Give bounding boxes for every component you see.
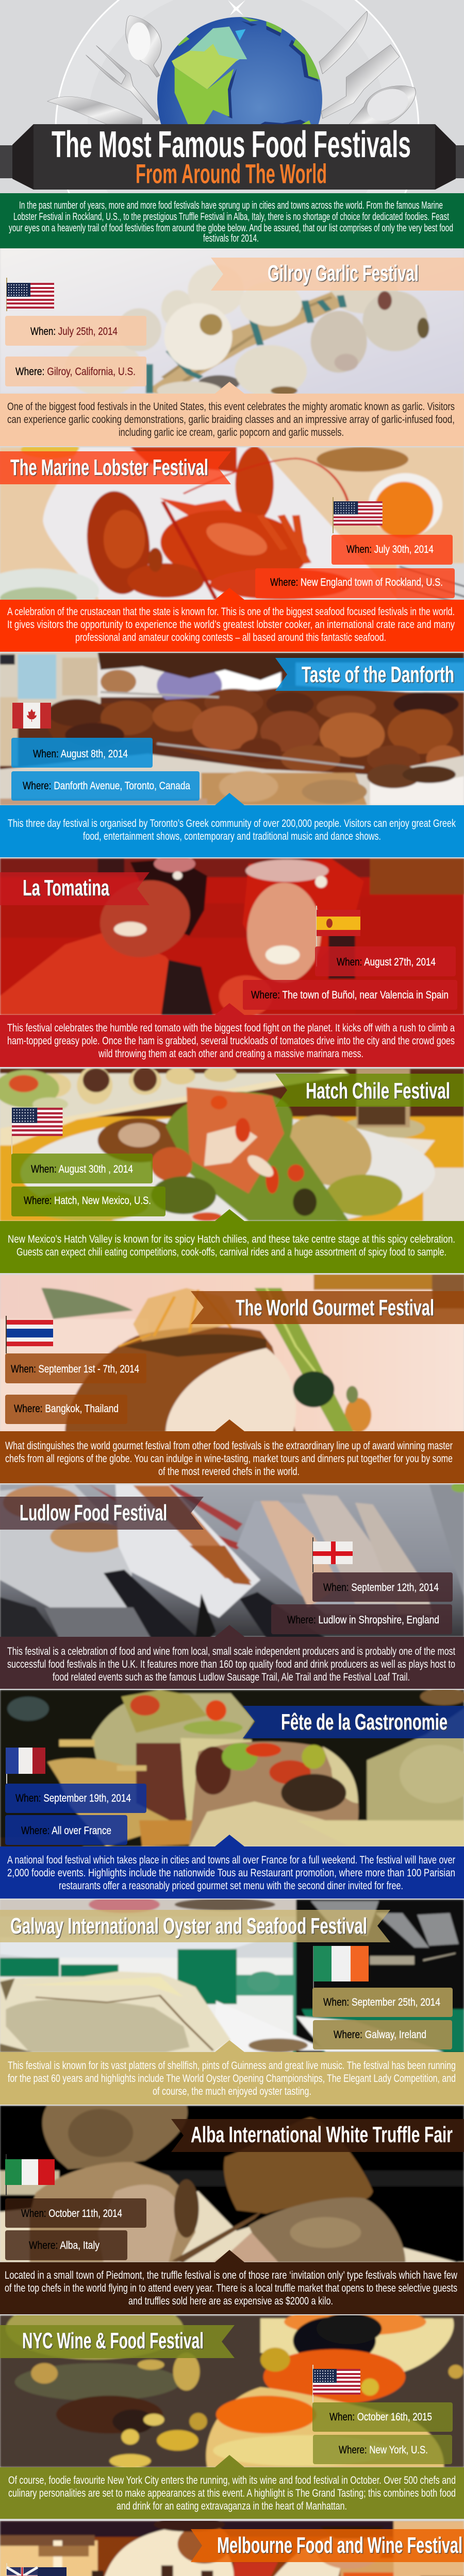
icon: US flag bbox=[12, 1108, 62, 1154]
when box bbox=[5, 1353, 146, 1383]
description panel: food, entertainment shows, contemporary and traditional music and dance shows. bbox=[83, 831, 381, 842]
when box bbox=[312, 1572, 453, 1602]
section: Gilroy Garlic Festival bbox=[0, 248, 464, 446]
title banner bbox=[243, 1706, 464, 1738]
when box bbox=[315, 946, 456, 976]
title banner: The Marine Lobster Festival bbox=[10, 455, 208, 480]
title banner: Ludlow Food Festival bbox=[20, 1500, 167, 1526]
description panel bbox=[0, 2040, 464, 2105]
header: plate, globe and cutlery illustration bbox=[47, 0, 420, 193]
title banner bbox=[0, 872, 150, 905]
when box: When: July 25th, 2014 bbox=[30, 326, 118, 337]
description panel bbox=[0, 1209, 464, 1273]
description panel: including garlic ice cream, garlic popcorn and garlic mussels. bbox=[119, 427, 344, 438]
title banner bbox=[211, 258, 464, 291]
icon: Ireland flag bbox=[313, 1946, 369, 1993]
title banner bbox=[0, 2325, 235, 2358]
title banner bbox=[191, 1291, 464, 1324]
when box: When: September 19th, 2014 bbox=[15, 1792, 131, 1804]
when box: When: August 30th , 2014 bbox=[31, 1163, 133, 1175]
subtitle: From Around The World bbox=[136, 159, 327, 190]
where box bbox=[11, 771, 200, 801]
photo: roasted birds on spits bbox=[0, 653, 464, 807]
photo: plated fish with asparagus bbox=[0, 1274, 464, 1432]
icon: Canada flag bbox=[12, 703, 51, 728]
description panel bbox=[0, 1835, 464, 1899]
section: La Tomatina bbox=[0, 855, 464, 1067]
intro text panel: festivals for 2014. bbox=[203, 233, 259, 244]
when box bbox=[11, 1154, 153, 1183]
icon: Italy flag bbox=[5, 2154, 55, 2195]
when box bbox=[5, 2198, 146, 2228]
photo: artichoke pintxos bbox=[0, 1688, 464, 1848]
when box bbox=[5, 1784, 146, 1813]
photo: lobster bbox=[0, 447, 464, 600]
photo: chefs in a kitchen bbox=[0, 2517, 464, 2576]
photo: oyster and stout bbox=[0, 1896, 464, 2061]
title banner bbox=[275, 1074, 464, 1107]
when box bbox=[332, 535, 453, 565]
title banner bbox=[275, 658, 464, 691]
title banner: NYC Wine & Food Festival bbox=[22, 2328, 204, 2353]
where box: Where: All over France bbox=[21, 1825, 111, 1837]
photo: stuffed chile plate bbox=[0, 1066, 464, 1230]
intro text panel bbox=[0, 193, 464, 248]
description panel: of the most revered chefs in the world. bbox=[158, 1466, 300, 1478]
description panel: and truffles sold here are as expensive as $2000 a kilo. bbox=[128, 2295, 333, 2307]
where box bbox=[5, 1815, 127, 1845]
when box bbox=[5, 316, 146, 346]
title banner bbox=[0, 1910, 390, 1942]
title banner bbox=[0, 124, 464, 190]
where box bbox=[5, 2230, 127, 2260]
where box bbox=[5, 1395, 127, 1424]
where box bbox=[313, 2435, 452, 2464]
photo: garlic bbox=[0, 248, 464, 400]
when box: When: August 27th, 2014 bbox=[337, 956, 436, 968]
description panel bbox=[0, 2455, 464, 2519]
icon: England flag bbox=[313, 1537, 353, 1572]
title banner: La Tomatina bbox=[23, 875, 109, 901]
icon: cutlery bbox=[47, 11, 416, 124]
where box: Where: Hatch, New Mexico, U.S. bbox=[24, 1195, 151, 1207]
section: Alba International White Truffle Fair bbox=[0, 2106, 464, 2314]
where box bbox=[5, 357, 146, 386]
photo: white ramekins bbox=[0, 1482, 464, 1638]
where box: Where: Alba, Italy bbox=[29, 2240, 100, 2251]
description panel bbox=[0, 588, 464, 652]
description panel bbox=[0, 1419, 464, 1483]
when box bbox=[11, 738, 153, 768]
when box bbox=[312, 1988, 453, 2017]
description panel bbox=[0, 2250, 464, 2314]
section: The World Gourmet Festival bbox=[0, 1274, 464, 1483]
icon: plate bbox=[55, 0, 420, 193]
section: Ludlow Food Festival bbox=[0, 1482, 464, 1689]
icon: Spain flag bbox=[317, 906, 360, 967]
when box: When: September 25th, 2014 bbox=[323, 1996, 440, 2008]
description panel bbox=[0, 793, 464, 857]
where box bbox=[255, 568, 455, 598]
when box: When: September 1st - 7th, 2014 bbox=[11, 1363, 139, 1375]
when box bbox=[312, 2402, 453, 2432]
title banner bbox=[0, 1497, 204, 1530]
section: The Marine Lobster Festival bbox=[0, 442, 464, 652]
section: Taste of the Danforth bbox=[0, 653, 464, 857]
description panel: and drink for an eating extravaganza in the heart of Manhattan. bbox=[117, 2500, 347, 2512]
where box: Where: Ludlow in Shropshire, England bbox=[287, 1614, 439, 1626]
where box: Where: Bangkok, Thailand bbox=[14, 1403, 119, 1415]
description panel bbox=[0, 1003, 464, 1067]
when box: When: October 11th, 2014 bbox=[21, 2208, 122, 2219]
description panel: wild throwing them at each other and creating a massive marinara mess. bbox=[98, 1048, 363, 1060]
where box bbox=[11, 1187, 165, 1216]
photo: caviar and gold canapes bbox=[0, 2298, 464, 2468]
section: NYC Wine & Food Festival bbox=[0, 2298, 464, 2519]
icon: US flag bbox=[333, 497, 383, 533]
photo: people covered in tomato bbox=[0, 855, 464, 1016]
section: Melbourne Food and Wine Festival bbox=[0, 2517, 464, 2576]
when box: When: September 12th, 2014 bbox=[323, 1582, 439, 1594]
icon: Thailand flag bbox=[6, 1316, 53, 1353]
when box: When: July 30th, 2014 bbox=[346, 544, 434, 555]
where box: Where: New York, U.S. bbox=[339, 2444, 428, 2456]
title banner bbox=[0, 451, 231, 484]
where box bbox=[271, 1604, 452, 1634]
when box: When: October 16th, 2015 bbox=[329, 2411, 432, 2423]
icon: France flag bbox=[6, 1748, 45, 1784]
icon: US flag bbox=[313, 2365, 360, 2402]
icon: US flag bbox=[7, 278, 54, 311]
photo: white truffles bbox=[0, 2106, 464, 2263]
title banner bbox=[191, 2529, 464, 2562]
where box bbox=[313, 2020, 452, 2049]
description panel: of course, the much enjoyed oyster tasting. bbox=[153, 2086, 311, 2097]
when box: When: August 8th, 2014 bbox=[33, 748, 128, 760]
where box: Where: Gilroy, California, U.S. bbox=[15, 366, 136, 378]
section: Galway International Oyster and Seafood Festival bbox=[0, 1896, 464, 2105]
icon: globe bbox=[157, 17, 322, 124]
where box: Where: Galway, Ireland bbox=[334, 2029, 426, 2041]
section: Hatch Chile Festival bbox=[0, 1066, 464, 1273]
icon: Australia flag bbox=[7, 2563, 67, 2576]
where box: Where: Danforth Avenue, Toronto, Canada bbox=[23, 780, 190, 792]
where box bbox=[243, 980, 457, 1010]
description panel bbox=[0, 382, 464, 446]
section: Fête de la Gastronomie bbox=[0, 1688, 464, 1899]
description panel bbox=[0, 1625, 464, 1689]
